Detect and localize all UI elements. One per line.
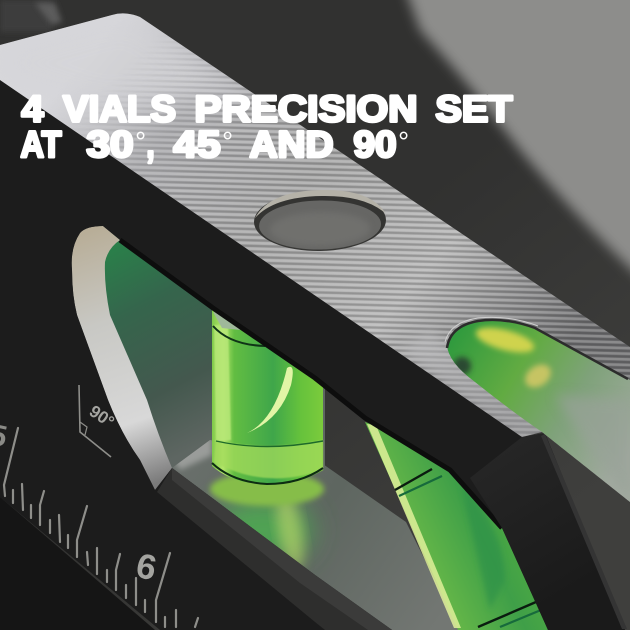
rounded metal rim of window: [72, 226, 172, 490]
title: 45: [174, 123, 220, 165]
title: PRECISION: [194, 87, 418, 129]
icon: 90 degree angle mark: 90°: [86, 402, 118, 432]
title: AND: [250, 123, 334, 165]
title: 4: [22, 87, 44, 129]
vial: vertical 90 degree: [210, 310, 324, 506]
title: °: [222, 126, 233, 157]
title: ,: [146, 123, 154, 165]
title: VIALS: [63, 87, 176, 129]
title: AT: [20, 123, 62, 165]
window interior: [75, 225, 325, 485]
ruler scale markings: [4, 428, 198, 627]
title: SET: [436, 87, 513, 129]
title: °: [398, 126, 409, 157]
angled vial seen through plate hole: [445, 317, 630, 502]
title: °: [135, 126, 146, 157]
title: [20, 87, 513, 165]
dark table surface: [0, 497, 155, 630]
vial: angled 45 degree: [365, 422, 548, 630]
title: 30: [86, 123, 134, 165]
magnet insert in plate: [253, 189, 386, 252]
icon: 90 degree angle mark: [79, 385, 118, 457]
floor of the window: [168, 436, 460, 630]
title: 90: [354, 123, 396, 165]
ruler numeral 6: 6: [133, 546, 160, 588]
